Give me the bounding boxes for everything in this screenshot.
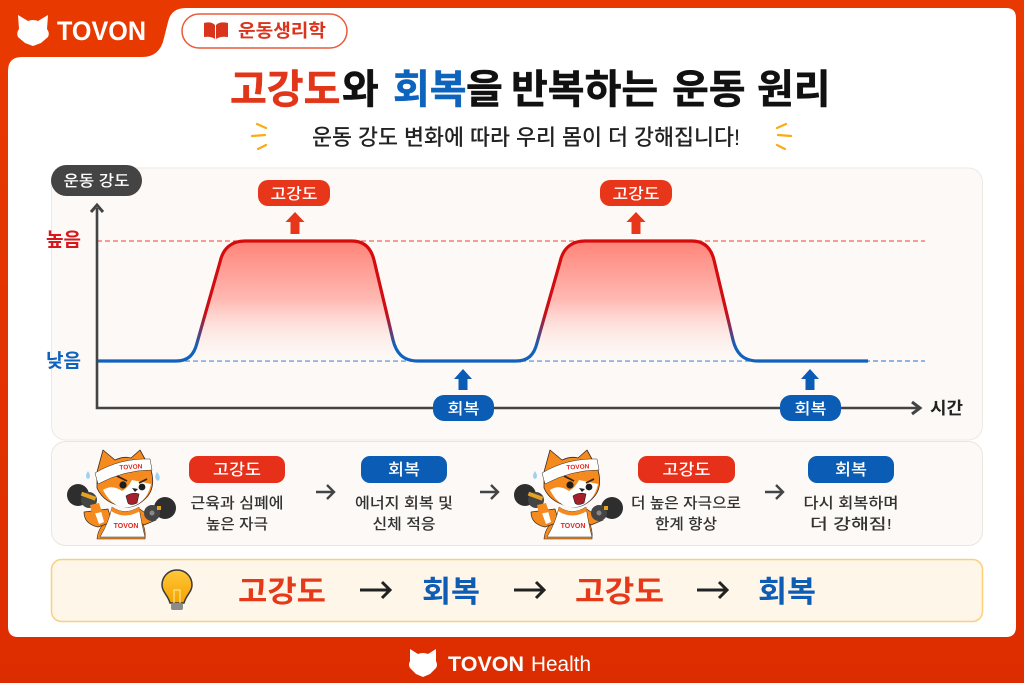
step 3: 더 높은 자극으로 <box>631 495 741 512</box>
panel: process flow <box>52 442 982 546</box>
step 2 <box>355 456 453 533</box>
label high: 높음 <box>46 229 81 251</box>
step 2: 신체 적응 <box>372 516 436 533</box>
step 1: 고강도 <box>213 461 261 479</box>
title: 원리 <box>757 68 831 112</box>
shirt logo: TOVON <box>114 523 138 530</box>
recovery tag 1 <box>433 395 494 421</box>
icon: cat head <box>409 649 437 677</box>
panel: summary cycle <box>52 560 982 622</box>
y axis arrowhead <box>91 205 103 212</box>
title: 운동 <box>672 68 746 112</box>
arrow up 1 <box>286 212 304 234</box>
recovery arrow 2 <box>801 369 819 390</box>
recovery tag 1: 회복 <box>448 400 480 418</box>
footer brand <box>409 649 591 677</box>
step 2: 회복 <box>388 461 420 479</box>
recovery arrow 1 <box>454 369 472 390</box>
high intensity tag 1 <box>258 180 330 206</box>
summary arrow 2 <box>514 582 544 598</box>
category badge <box>182 14 347 48</box>
area under first peak <box>186 241 416 361</box>
icon: light bulb <box>162 570 192 610</box>
high intensity tag 1: 고강도 <box>270 185 318 203</box>
step 4: 다시 회복하며 <box>804 495 898 512</box>
sparkle left <box>252 124 266 149</box>
y axis title <box>51 165 142 196</box>
summary arrow 1 <box>360 582 390 598</box>
step 3 <box>631 456 741 533</box>
title: 회복 <box>393 68 467 112</box>
step 1: 근육과 심폐에 <box>190 495 284 512</box>
subtitle: 운동 강도 변화에 따라 우리 몸이 더 강해집니다! <box>312 125 740 150</box>
arrow 3 <box>765 485 783 499</box>
icon: cat head <box>17 15 49 46</box>
title: 와 <box>342 68 379 112</box>
mascot 1 <box>67 450 176 539</box>
step 4: 회복 <box>835 461 867 479</box>
recovery tag 2: 회복 <box>794 400 826 418</box>
step 4: 더 강해짐! <box>810 516 892 533</box>
axes <box>97 208 918 408</box>
low intensity dashed line <box>97 360 925 362</box>
label low: 낮음 <box>46 350 81 372</box>
sparkle right <box>777 124 791 149</box>
sweat drops <box>86 471 160 481</box>
arrow 2 <box>480 485 498 499</box>
brand name: TOVON <box>57 16 146 46</box>
shirt logo: TOVON <box>561 523 585 530</box>
panel: intensity chart <box>46 165 982 440</box>
intensity curve <box>97 241 868 361</box>
summary text 2: 회복 <box>422 576 480 609</box>
step 3: 고강도 <box>662 461 710 479</box>
headband logo: TOVON <box>566 463 590 472</box>
summary text 3: 고강도 <box>575 576 664 609</box>
headband logo: TOVON <box>119 463 143 472</box>
arrow up 2 <box>626 212 646 234</box>
summary arrow 3 <box>697 582 727 598</box>
high intensity tag 2 <box>600 180 672 206</box>
badge label: 운동생리학 <box>238 21 326 41</box>
icon: open book <box>204 22 228 39</box>
label time: 시간 <box>930 399 963 418</box>
step 3: 한계 향상 <box>655 516 717 533</box>
x axis arrowhead <box>912 402 920 414</box>
title: 을 <box>466 68 503 112</box>
arrow 1 <box>316 485 334 499</box>
sweat drop <box>533 471 537 479</box>
step 1: 높은 자극 <box>206 516 268 533</box>
step 1 <box>189 456 285 533</box>
area under second peak <box>526 241 756 361</box>
title: 반복하는 <box>511 68 658 112</box>
mascot 2 <box>514 450 623 539</box>
title: 고강도 <box>230 68 340 112</box>
summary text 4: 회복 <box>758 576 816 609</box>
summary text 1: 고강도 <box>238 576 326 609</box>
recovery tag 2 <box>780 395 841 421</box>
high intensity dashed line <box>97 240 925 242</box>
step 2: 에너지 회복 및 <box>355 495 453 512</box>
step 4 <box>804 456 898 533</box>
footer brand: Health <box>531 653 591 676</box>
brand logo <box>17 15 146 46</box>
y axis title: 운동 강도 <box>64 172 130 190</box>
high intensity tag 2: 고강도 <box>612 185 660 203</box>
footer text: TOVON <box>448 653 524 676</box>
